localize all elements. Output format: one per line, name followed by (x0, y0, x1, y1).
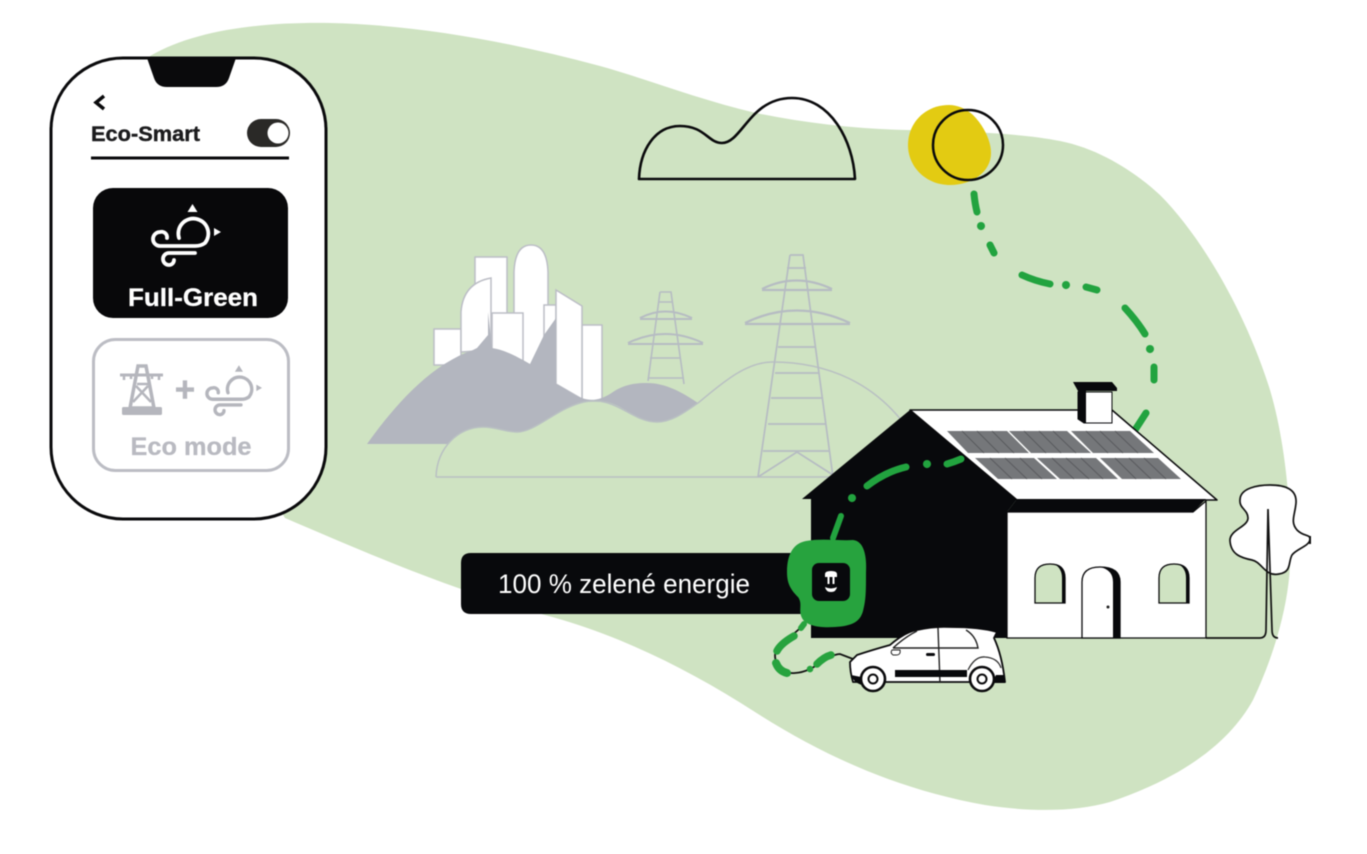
heading: Eco-Smart: Eco-Smart (91, 122, 200, 146)
left window (1035, 564, 1065, 603)
card: Eco mode (94, 340, 288, 470)
panel cell lines (962, 431, 1166, 479)
large pylon (745, 255, 850, 477)
icon: wind and sun (153, 204, 221, 265)
roof fascia (1007, 499, 1206, 512)
skyline buildings (434, 245, 602, 401)
right window (1159, 564, 1189, 603)
car details (893, 628, 978, 683)
roof (910, 410, 1217, 500)
car (850, 627, 1005, 691)
divider under heading (91, 156, 289, 160)
hill outline and ground (436, 362, 905, 477)
label: Full-Green: Full-Green (128, 284, 258, 312)
charging cable (775, 624, 853, 673)
back chevron (96, 96, 104, 109)
solar panels (947, 431, 1181, 479)
city and hills (367, 245, 905, 477)
phone frame (51, 58, 326, 519)
icon: plug (825, 571, 837, 592)
house (802, 382, 1217, 638)
toggle switch (247, 119, 290, 147)
energy path: sun to roof (974, 194, 1154, 430)
plus sign: + (175, 370, 195, 410)
small pylon (628, 292, 703, 384)
card: Full-Green (93, 188, 288, 318)
black gable wall (802, 410, 1017, 638)
charger (787, 540, 866, 627)
icon: pylon (120, 366, 163, 415)
chimney (1073, 382, 1117, 423)
label: Eco mode: Eco mode (130, 433, 252, 461)
white front wall (1007, 501, 1206, 638)
cloud outline (639, 98, 855, 179)
car body (850, 627, 1005, 682)
grey hill (367, 312, 698, 444)
phone app mockup (51, 58, 326, 519)
front wheel (861, 667, 885, 691)
rear wheel (970, 667, 994, 691)
callout: 100 % zelené energie (461, 553, 810, 614)
tree and ground line (1206, 485, 1311, 638)
background green blob (150, 23, 1290, 810)
sun (908, 105, 1003, 185)
phone notch (147, 58, 236, 87)
icon: wind and sun, muted (207, 365, 262, 415)
door (1082, 567, 1120, 638)
energy path: panels to charger (833, 459, 961, 538)
callout: 100 % zelené energie: 100 % zelené energie (498, 569, 750, 599)
